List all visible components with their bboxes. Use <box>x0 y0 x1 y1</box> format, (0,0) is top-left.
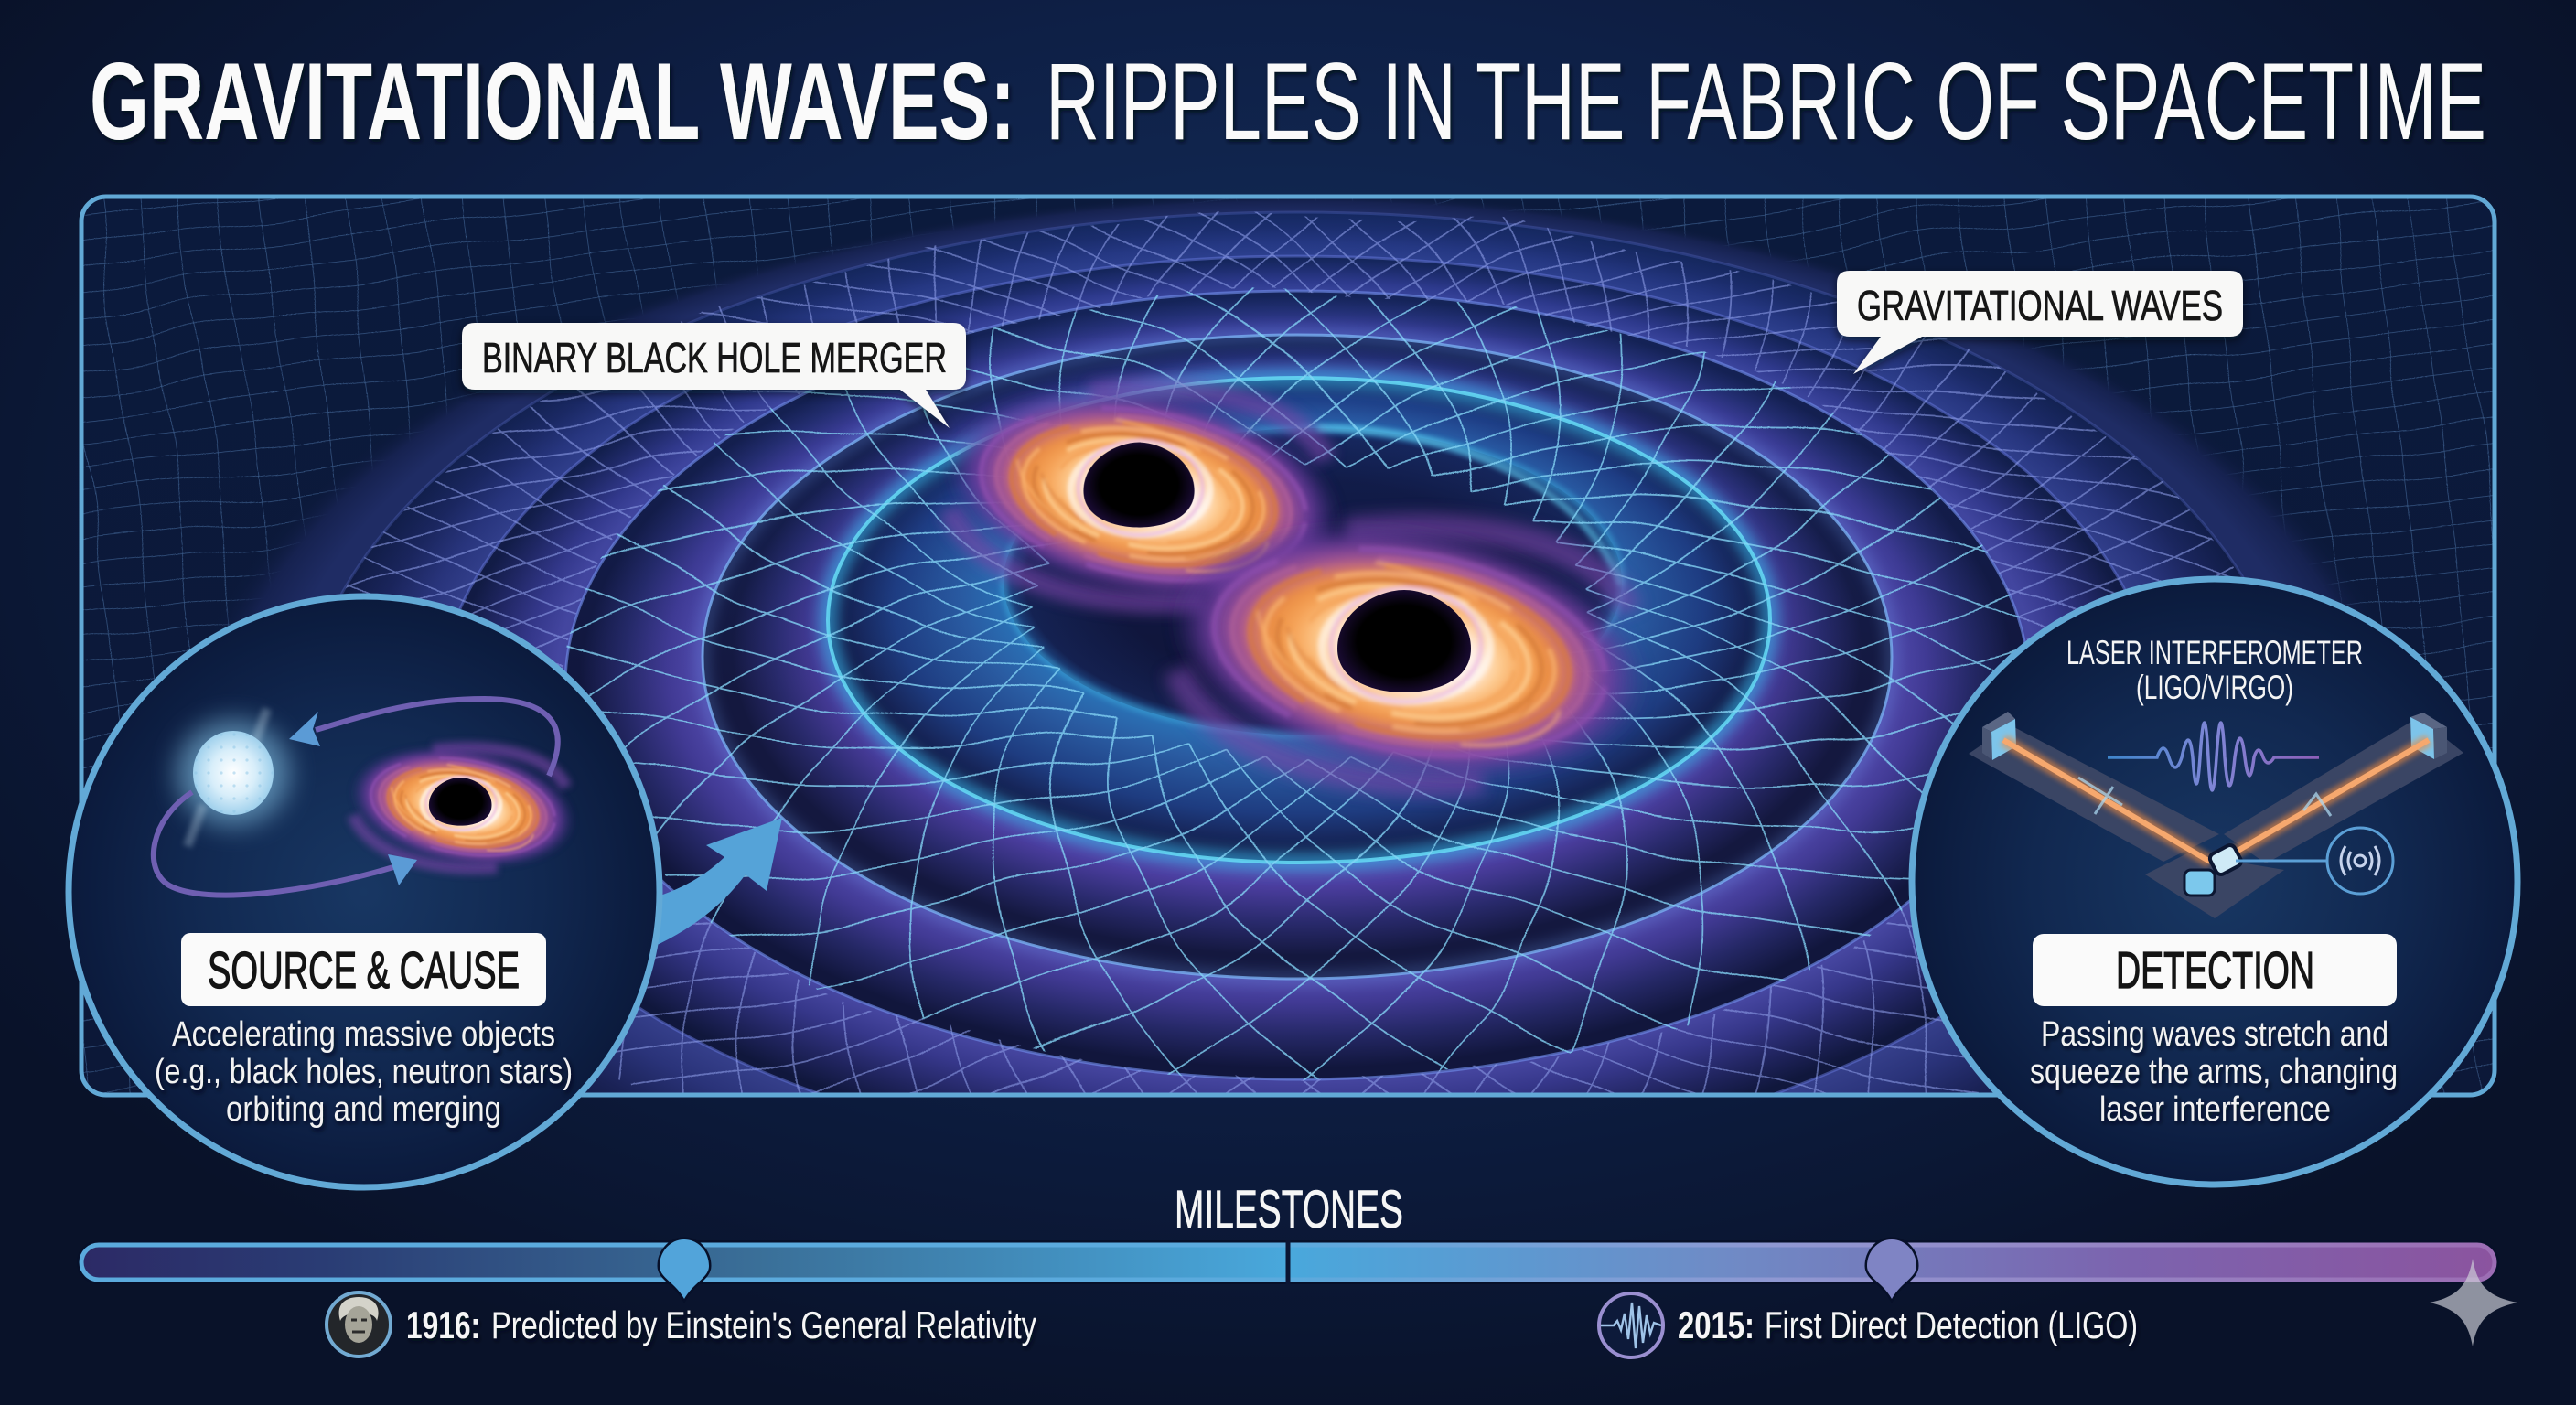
ripple mesh <box>346 211 2234 1092</box>
icon: small black hole <box>342 731 584 883</box>
icon: sparkle <box>2430 1259 2517 1346</box>
waveform <box>2108 723 2319 790</box>
callout: binary black hole merger: BINARY BLACK HOLE MERGER <box>482 334 947 381</box>
label <box>406 1303 1036 1346</box>
merging black holes <box>930 359 1667 814</box>
arrow: source to ripples <box>651 818 782 948</box>
interferometer diagram <box>1969 712 2463 918</box>
circle <box>69 596 660 1187</box>
arrow: orbit top <box>289 699 558 776</box>
panel: source and cause <box>69 596 660 1187</box>
description: orbiting and merging <box>226 1090 501 1129</box>
icon: Einstein portrait <box>327 1292 391 1357</box>
callout: gravitational waves <box>1837 271 2243 374</box>
description: Passing waves stretch and <box>2041 1015 2388 1054</box>
left mirror <box>1982 712 2016 760</box>
label pill: SOURCE & CAUSE <box>208 941 520 1000</box>
black hole upper <box>930 359 1357 628</box>
circle <box>1912 579 2517 1185</box>
panel: detection <box>1912 579 2517 1185</box>
timeline bar <box>77 1240 2499 1284</box>
milestone: 1916 <box>327 1292 1036 1357</box>
description: laser interference <box>2099 1090 2331 1129</box>
pin: 2015 <box>1867 1239 1916 1299</box>
label: 1916: <box>406 1303 480 1346</box>
icon: waveform badge <box>1599 1293 1663 1357</box>
label: First Direct Detection (LIGO) <box>1765 1303 2138 1346</box>
right mirror <box>2410 713 2447 759</box>
description <box>2030 1015 2398 1129</box>
title <box>90 40 2486 163</box>
interferometer heading <box>2066 634 2363 706</box>
label pill <box>2033 934 2397 1006</box>
ripple rings <box>216 199 2366 1092</box>
milestones heading: MILESTONES <box>1175 1180 1403 1239</box>
black hole lower <box>1153 490 1667 814</box>
description: Accelerating massive objects <box>172 1015 555 1054</box>
description: (e.g., black holes, neutron stars) <box>155 1053 573 1091</box>
interferometer heading: LASER INTERFEROMETER <box>2066 634 2363 671</box>
callout: gravitational waves: GRAVITATIONAL WAVES <box>1857 282 2223 329</box>
label pill: DETECTION <box>2116 941 2314 1000</box>
arrow: orbit bottom <box>154 792 417 896</box>
callout: binary black hole merger <box>462 323 966 428</box>
description <box>155 1015 573 1129</box>
icon: neutron star <box>177 709 290 846</box>
panel border <box>81 197 2495 1095</box>
label: 2015: <box>1678 1303 1755 1346</box>
description: squeeze the arms, changing <box>2030 1053 2398 1091</box>
label <box>1678 1303 2138 1346</box>
pin: 1916 <box>660 1239 709 1299</box>
milestone: 2015 <box>1599 1293 2138 1357</box>
title: GRAVITATIONAL WAVES: <box>90 40 1015 163</box>
label: Predicted by Einstein's General Relativity <box>491 1303 1036 1346</box>
panel: spacetime fabric with ripples <box>79 194 2497 1098</box>
interferometer heading: (LIGO/VIRGO) <box>2136 669 2293 706</box>
label pill <box>181 933 546 1006</box>
icon: detector signal <box>2327 828 2393 894</box>
